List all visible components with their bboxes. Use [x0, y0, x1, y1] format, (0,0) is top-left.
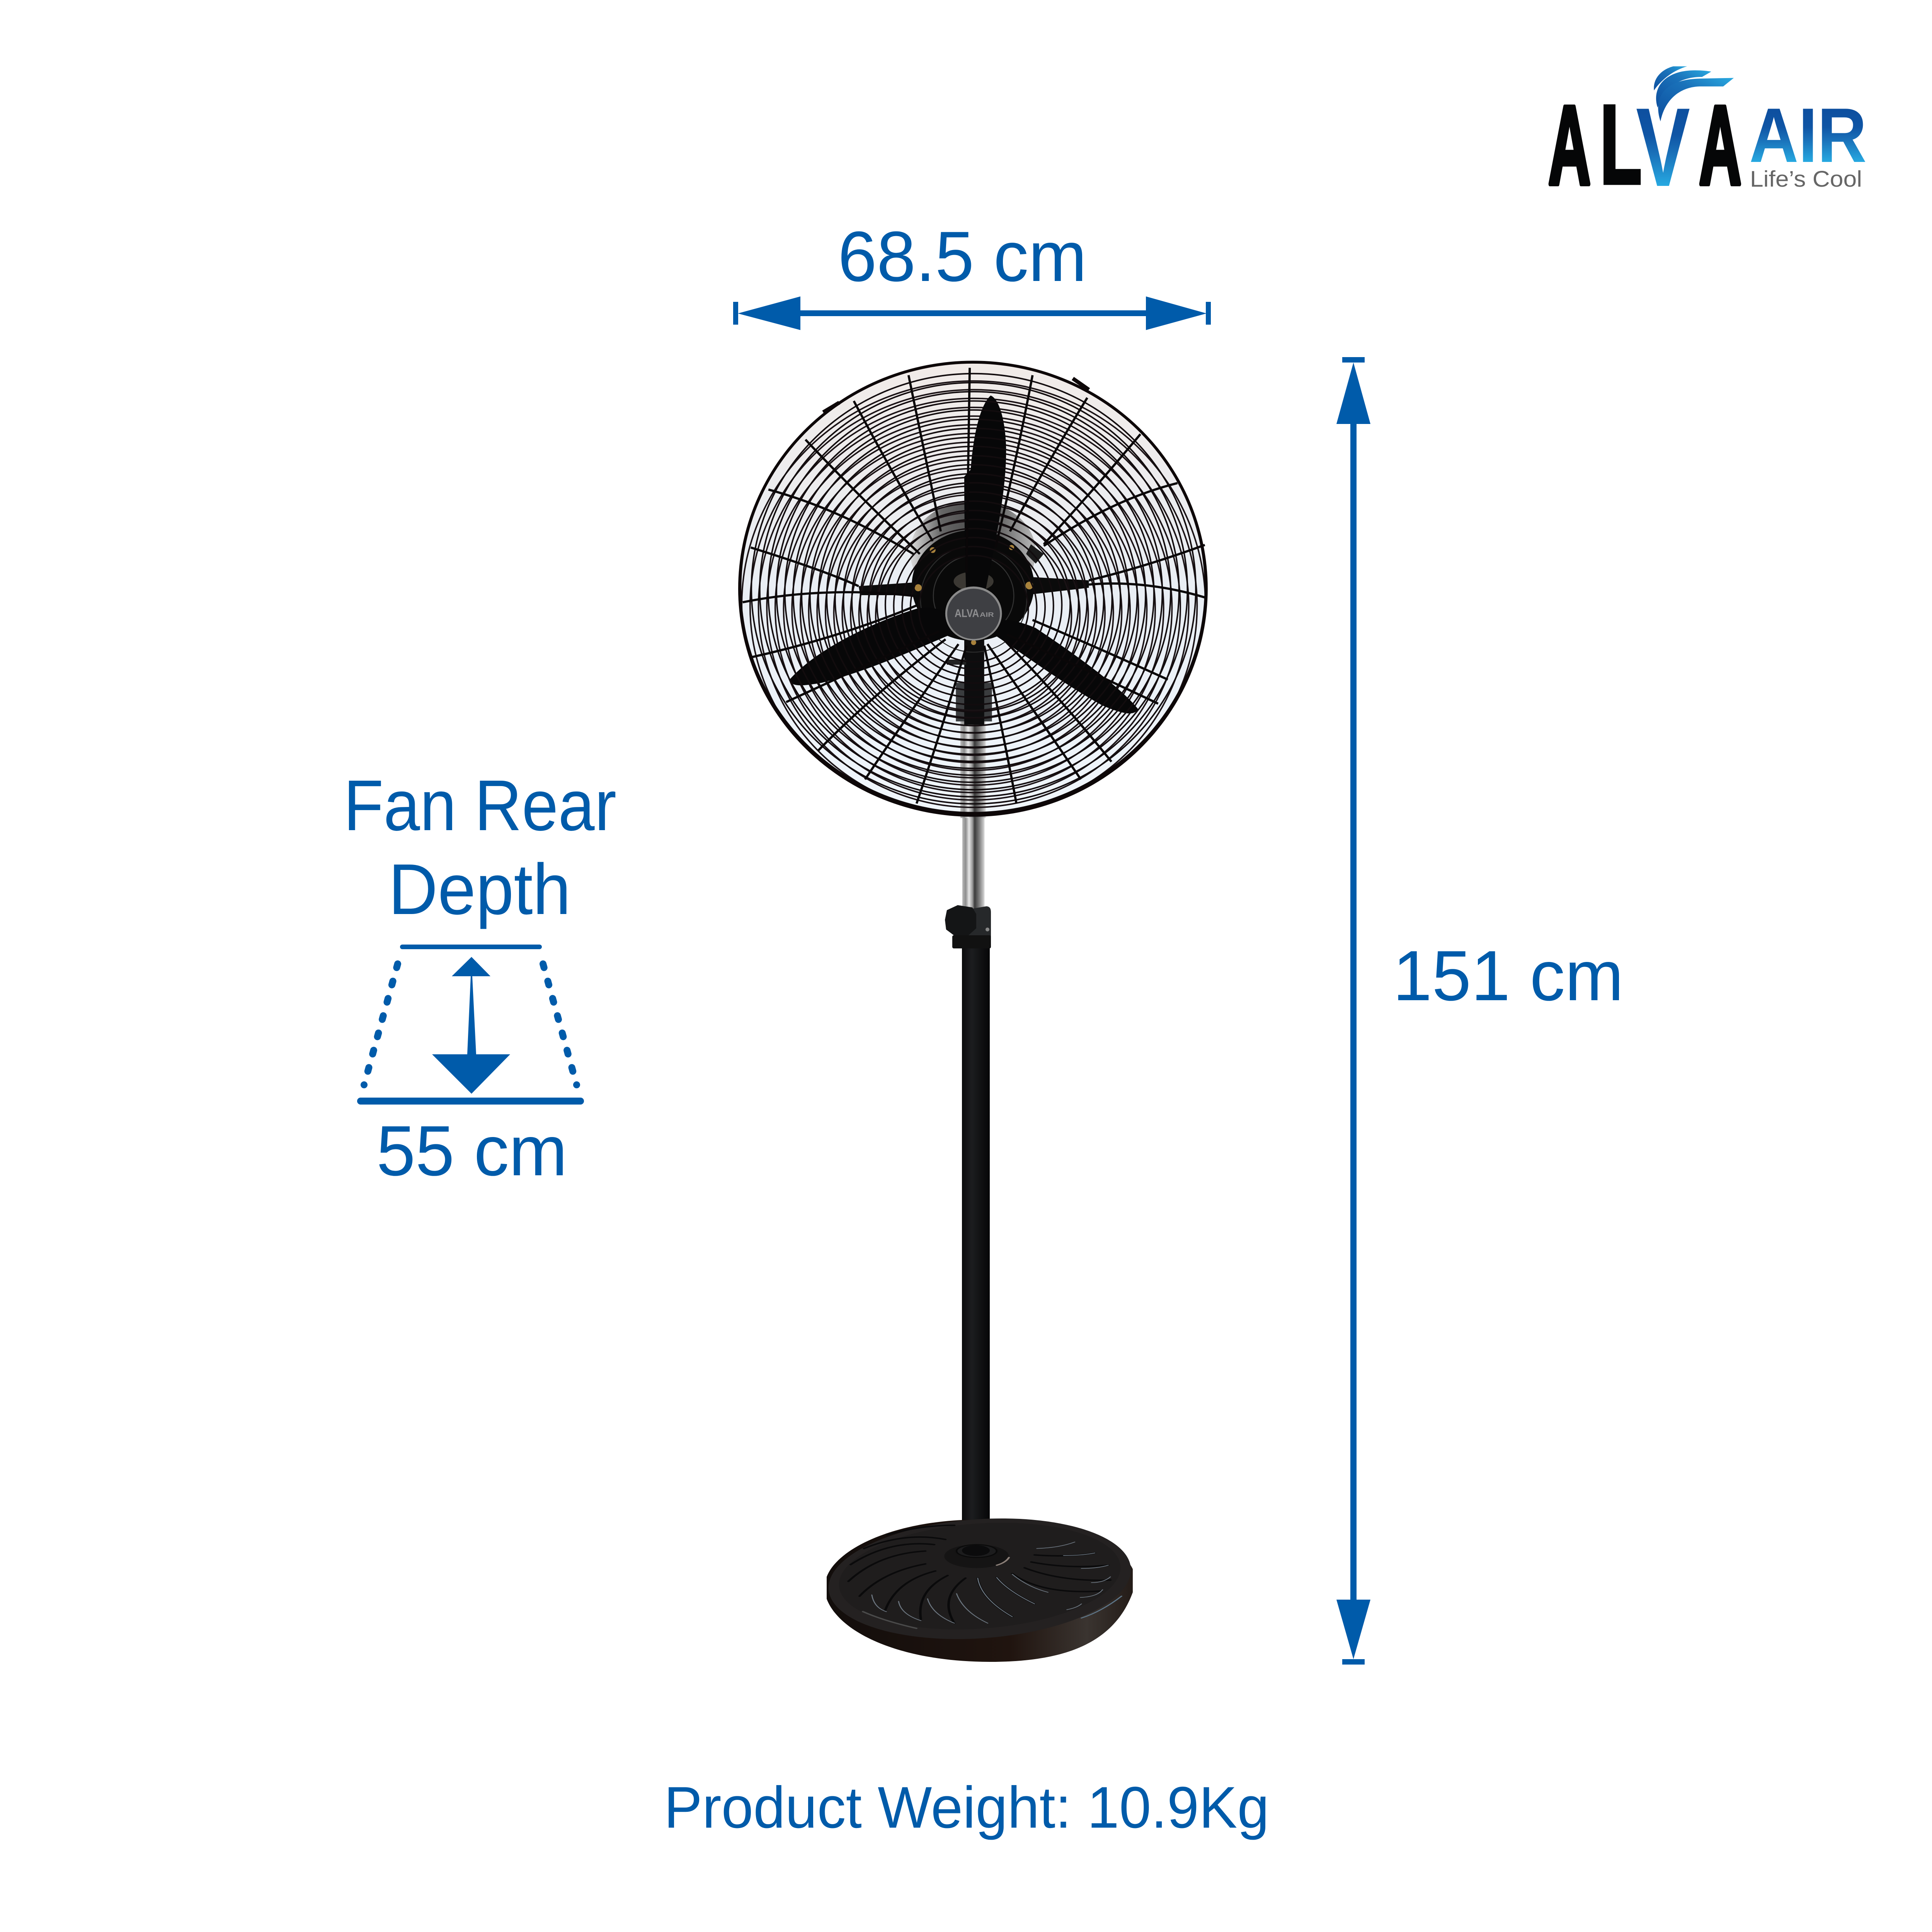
fan head and guard — [738, 361, 1208, 830]
fan base — [824, 1509, 1135, 1662]
label: fan width: 68.5 cm — [838, 216, 1087, 296]
label: depth value: 55 cm — [376, 1111, 567, 1190]
guard outer rim — [738, 361, 1208, 817]
logo wordmark ALVA: A — [1548, 83, 1591, 208]
product photo: pedestal fan — [738, 361, 1208, 1662]
arrow: total height — [1336, 357, 1370, 1665]
arrow: fan width — [733, 296, 1211, 330]
label: total height: 151 cm — [1393, 936, 1624, 1015]
front guard rings — [751, 374, 1196, 804]
logo wordmark ALVA: A — [1699, 83, 1741, 208]
hub cap with brand — [945, 586, 1002, 640]
depth trapezoid diagram — [361, 947, 580, 1101]
mast behind guard — [947, 638, 992, 818]
heading: fan rear depth: Depth — [388, 849, 571, 929]
panel: fan rear depth — [344, 766, 616, 1190]
hub cap with brand: AIR — [980, 611, 994, 618]
base swirl ridges — [848, 1525, 1122, 1628]
rear guard rings — [742, 381, 1205, 830]
fan pole — [945, 696, 991, 1554]
logo tagline: Life’s Cool — [1750, 167, 1862, 192]
logo wordmark AIR: AIR — [1749, 92, 1867, 179]
heading: fan rear depth: Fan Rear — [344, 766, 616, 846]
motor housing — [859, 501, 1089, 652]
logo wordmark ALVA: V — [1636, 85, 1690, 210]
logo wind swoosh — [1654, 66, 1734, 121]
logo: Alva Air — [1548, 66, 1867, 210]
hub cap with brand: ALVA — [955, 608, 979, 620]
label: product weight: Product Weight: 10.9Kg — [664, 1775, 1269, 1840]
heading: fan rear depth — [344, 766, 616, 929]
guard background — [739, 363, 1207, 815]
guard spokes — [743, 368, 1205, 803]
logo wordmark ALVA: L — [1600, 82, 1642, 207]
fan blades — [790, 395, 1138, 713]
logo wordmark ALVA — [1548, 82, 1741, 210]
